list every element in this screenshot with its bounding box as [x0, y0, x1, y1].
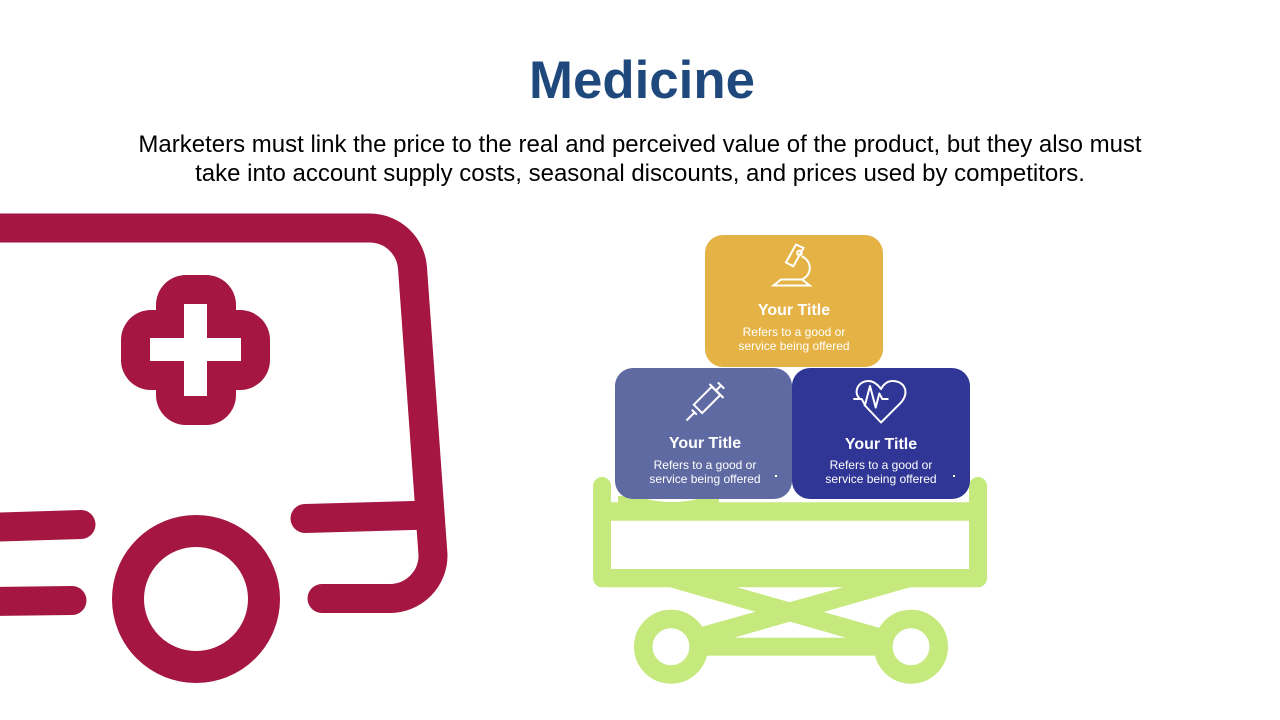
card: syringe: Your Title	[669, 435, 741, 452]
card: heart: service being offered	[825, 472, 937, 486]
card: heart: Refers to a good or	[830, 458, 932, 472]
intro text	[138, 131, 1142, 187]
card: heart: Your Title	[845, 436, 917, 453]
card: microscope: Refers to a good or	[743, 325, 845, 339]
icon: heart	[853, 380, 906, 424]
card: microscope	[705, 235, 883, 367]
icon: syringe	[686, 382, 725, 422]
card: microscope: Your Title	[758, 302, 830, 319]
intro text: take into account supply costs, seasonal discounts, and prices used by competitors.	[195, 160, 1085, 187]
dot	[953, 475, 955, 477]
card: syringe: Refers to a good or	[654, 458, 756, 472]
intro text: Marketers must link the price to the real and perceived value of the product, but they also must	[138, 131, 1142, 158]
icon: microscope	[770, 243, 813, 286]
card: syringe	[615, 368, 792, 499]
card: syringe: service being offered	[649, 472, 761, 486]
title: Medicine	[529, 51, 755, 110]
card: microscope: service being offered	[738, 339, 850, 353]
card: heart	[792, 368, 970, 499]
dot	[775, 475, 777, 477]
